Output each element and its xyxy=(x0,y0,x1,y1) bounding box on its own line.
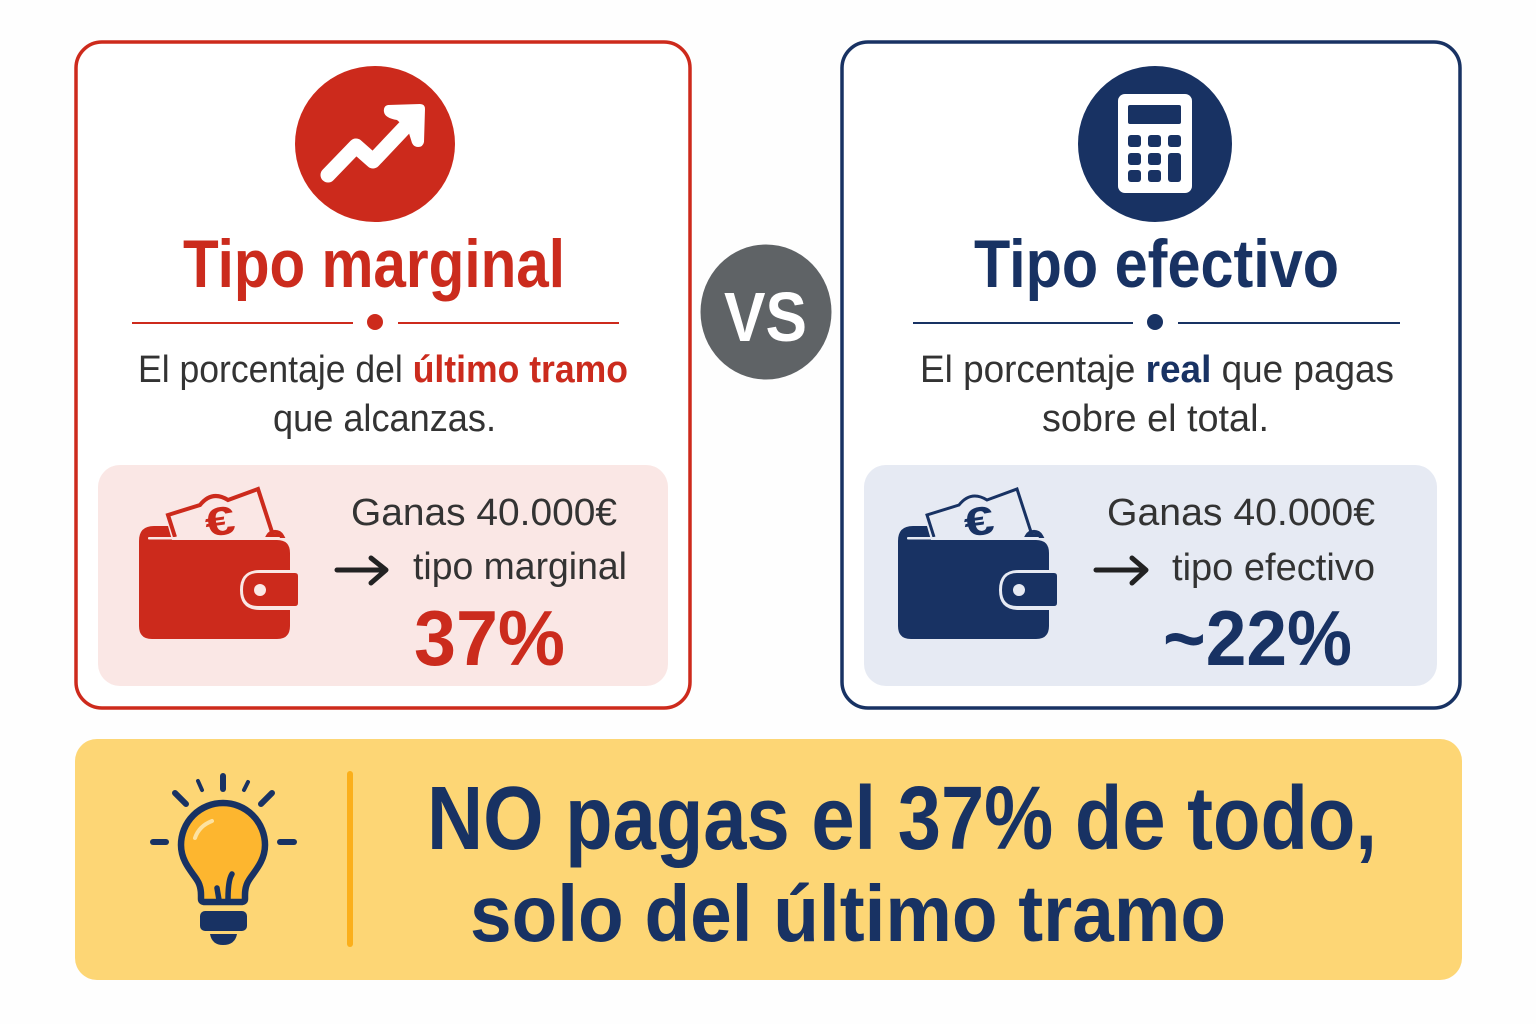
example box xyxy=(98,465,668,686)
text: ganas 40.000: Ganas 40.000€ xyxy=(351,492,617,534)
conclusion text xyxy=(427,769,1377,958)
value: ~22%: ~22% xyxy=(1163,594,1352,682)
conclusion text: NO pagas el 37% de todo, xyxy=(427,769,1377,869)
description text: sobre el total. xyxy=(1042,398,1269,440)
example box xyxy=(864,465,1437,686)
icon: wallet with euro note: € xyxy=(202,498,238,546)
vertical accent bar xyxy=(347,771,353,947)
arrow xyxy=(337,558,386,583)
description text: que alcanzas. xyxy=(273,398,496,440)
badge: VS: VS xyxy=(724,278,807,356)
icon: light bulb xyxy=(153,776,294,945)
description text xyxy=(920,349,1394,440)
description text: El porcentaje del último tramo xyxy=(138,349,628,391)
conclusion text: solo del último tramo xyxy=(470,869,1226,958)
description text: El porcentaje real que pagas xyxy=(920,349,1394,391)
divider with dot xyxy=(913,314,1400,330)
value: 37%: 37% xyxy=(414,594,565,682)
icon: wallet with euro note xyxy=(898,489,1057,639)
text: ganas 40.000: Ganas 40.000€ xyxy=(1107,492,1375,534)
icon: wallet with euro note xyxy=(139,489,298,639)
divider with dot xyxy=(132,314,619,330)
text: tipo marginal: tipo marginal xyxy=(413,546,627,588)
icon: wallet with euro note: € xyxy=(961,498,997,546)
icon: calculator xyxy=(1078,66,1232,222)
heading: tipo marginal: Tipo marginal xyxy=(183,226,565,302)
panel: tipo efectivo xyxy=(842,42,1460,708)
text: tipo efectivo: tipo efectivo xyxy=(1172,547,1375,589)
icon: rising arrow xyxy=(295,66,455,222)
panel: tipo marginal xyxy=(76,42,690,708)
arrow xyxy=(1096,558,1146,583)
banner: conclusion xyxy=(75,739,1462,980)
heading: tipo efectivo: Tipo efectivo xyxy=(974,226,1339,302)
description text xyxy=(138,349,628,440)
badge: VS xyxy=(700,244,832,380)
